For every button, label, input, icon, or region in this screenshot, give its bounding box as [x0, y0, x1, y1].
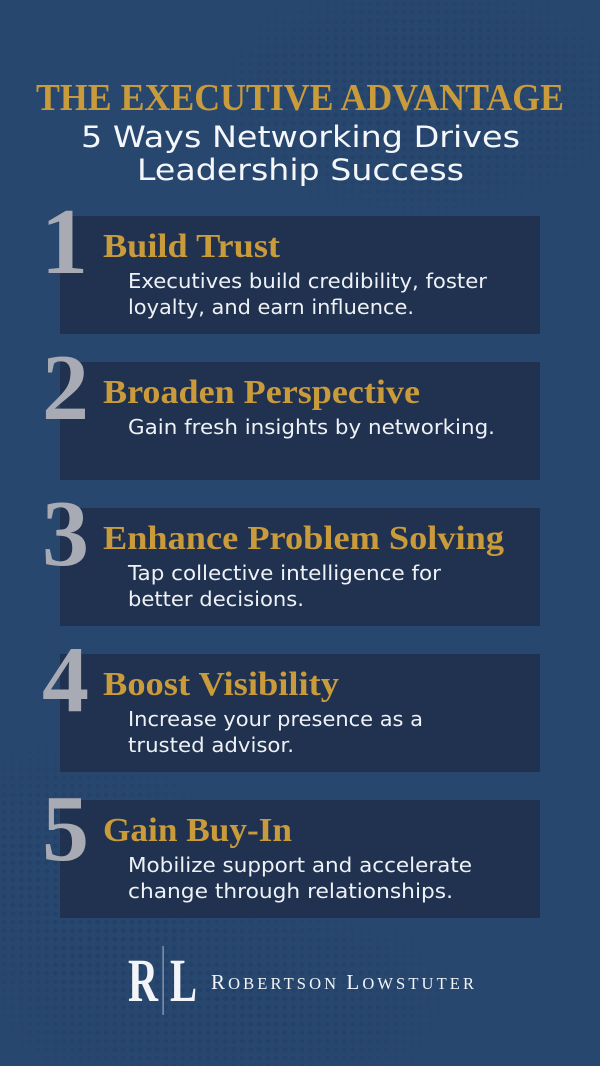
body text 1: loyalty, and earn influence.	[128, 295, 414, 319]
number 5: 5	[42, 777, 89, 881]
body text 5: change through relationships.	[128, 879, 453, 903]
logo: Robertson Lowstuter	[128, 946, 474, 1015]
body text 3: Tap collective intelligence for	[127, 561, 442, 585]
body text 4: Increase your presence as a	[128, 707, 423, 731]
body text 2: Gain fresh insights by networking.	[128, 415, 495, 439]
body text 4	[128, 707, 423, 757]
heading: broaden perspective: Broaden Perspective	[103, 374, 420, 411]
heading: enhance problem solving: Enhance Problem Solving	[103, 520, 504, 557]
logo monogram: R	[128, 948, 159, 1015]
panel: 2 broaden perspective	[42, 336, 540, 480]
subtitle	[81, 120, 520, 187]
panel: 4 boost visibility	[42, 628, 540, 772]
panel 2 background	[60, 362, 540, 480]
heading: build trust: Build Trust	[103, 228, 281, 265]
body text 4: trusted advisor.	[128, 733, 294, 757]
heading: boost visibility: Boost Visibility	[103, 666, 339, 703]
body text 5: Mobilize support and accelerate	[128, 853, 472, 877]
number 2: 2	[42, 336, 89, 440]
panel: 5 gain buy-in	[42, 777, 540, 918]
panel 4 background	[60, 654, 540, 772]
panel: 1 build trust	[41, 190, 540, 334]
panel 5 background	[60, 800, 540, 918]
body text 3	[127, 561, 442, 611]
number 4: 4	[42, 628, 89, 732]
number 3: 3	[42, 482, 89, 586]
body text 3: better decisions.	[128, 587, 304, 611]
logo monogram	[128, 946, 197, 1015]
body text 1	[128, 269, 488, 319]
logo monogram: L	[170, 948, 197, 1015]
panel 1 background	[60, 216, 540, 334]
heading: gain buy-in: Gain Buy-In	[103, 812, 292, 849]
body text 5	[128, 853, 472, 903]
panel: 3 enhance problem solving	[42, 482, 540, 626]
number 1: 1	[41, 190, 88, 294]
subtitle: 5 Ways Networking Drives	[81, 120, 520, 154]
body text 1: Executives build credibility, foster	[128, 269, 488, 293]
subtitle: Leadership Success	[137, 153, 464, 187]
title: THE EXECUTIVE ADVANTAGE	[36, 77, 564, 119]
panel 3 background	[60, 508, 540, 626]
logo wordmark: ROBERTSON LOWSTUTER	[211, 970, 474, 994]
